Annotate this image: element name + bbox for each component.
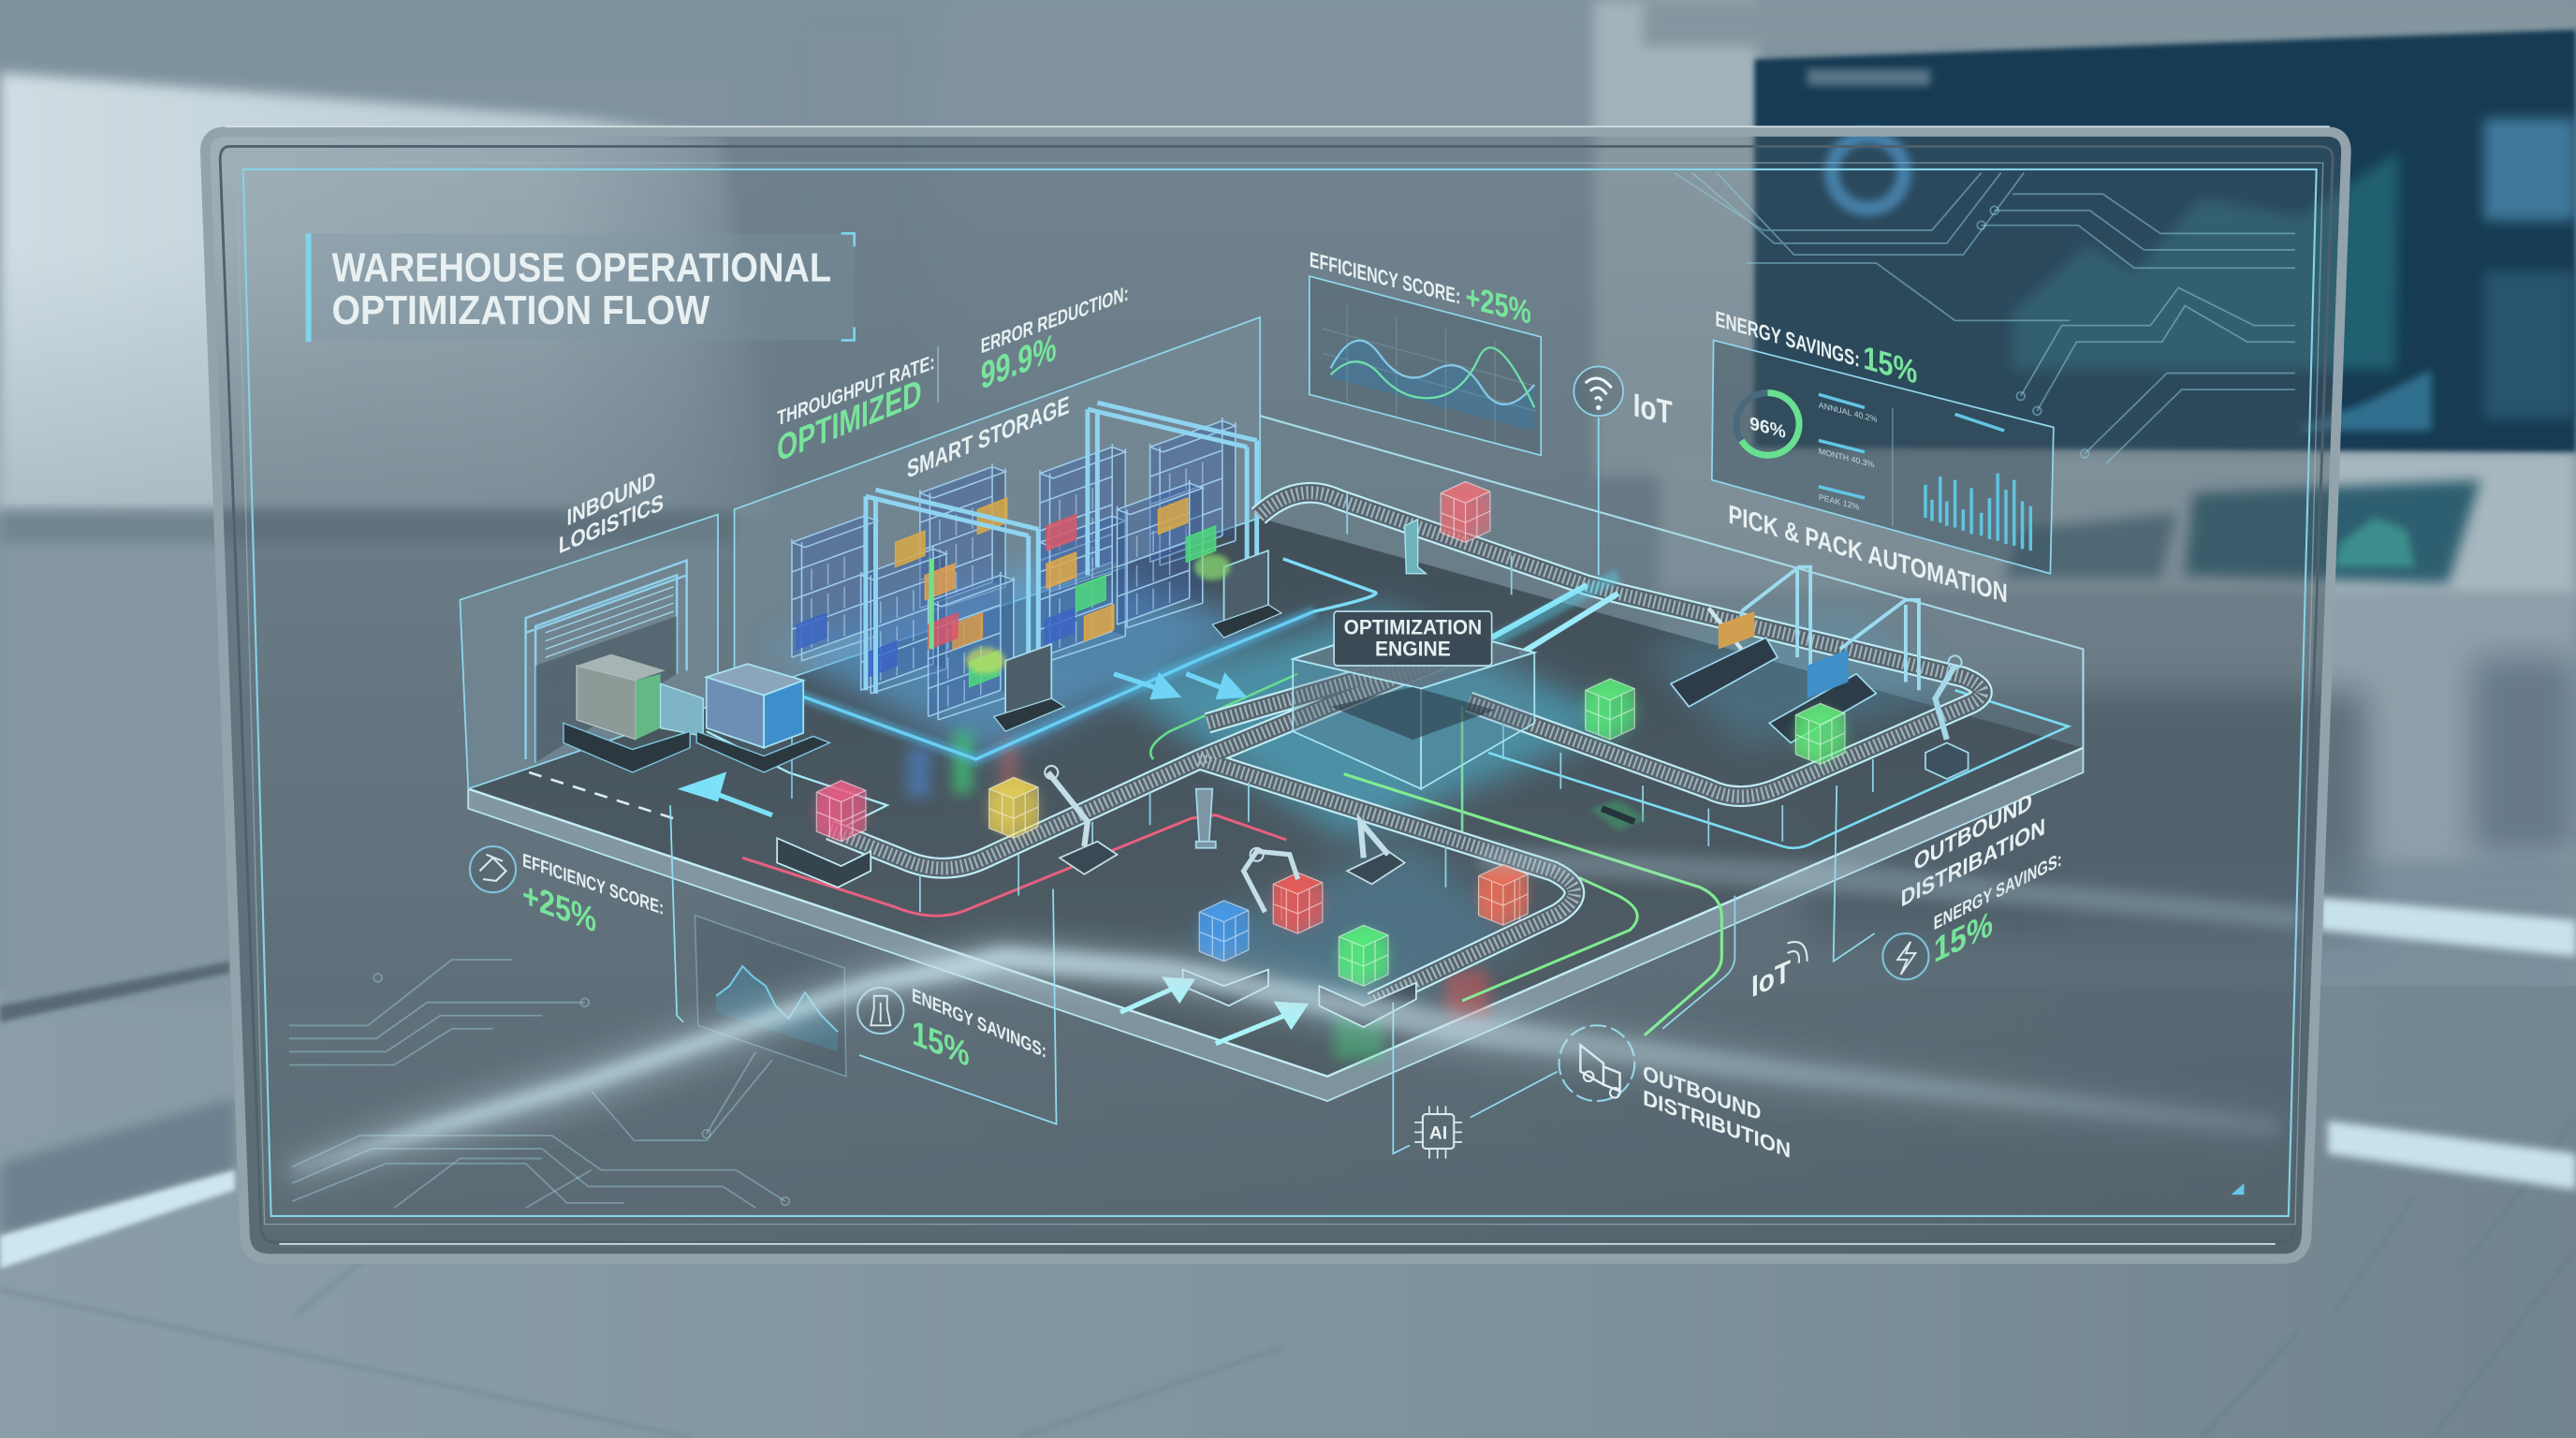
inbound logistics label: LOGISTICS: [559, 490, 664, 559]
robot arm right: [1925, 655, 1969, 779]
IoT badge top: [1573, 367, 1673, 575]
engine label: [1334, 611, 1492, 666]
callout: outbound and energy right: DISTRIBATION: [1901, 813, 2045, 913]
small corner marker: [2231, 1183, 2244, 1195]
inbound trailer: [696, 664, 829, 772]
KPI: error reduction: 99.9%: [981, 325, 1057, 398]
robot arm: lower left: [1045, 766, 1117, 874]
storage robots: [966, 550, 1281, 731]
truck badge: OUTBOUND: [1643, 1061, 1761, 1125]
dashboard: energy savings top: ENERGY SAVINGS:: [1715, 306, 1860, 372]
stored crates: [797, 498, 1216, 687]
pick and pack stations: [1671, 567, 1969, 779]
callout: energy savings lower: ENERGY SAVINGS:: [912, 985, 1046, 1063]
floor glow reflections: [772, 559, 1955, 1027]
chart: lower trend: [695, 916, 846, 1077]
title block: [305, 233, 855, 342]
gantry frames: [866, 403, 1257, 703]
callout: efficiency score lower: +25%: [522, 875, 596, 941]
teal robot post: [1405, 520, 1426, 574]
dashboard: energy savings top: [1712, 306, 2054, 574]
smart storage label: SMART STORAGE: [907, 390, 1070, 484]
KPI: throughput rate: THROUGHPUT RATE:: [777, 349, 935, 431]
background: floor tile lines: [0, 1118, 2576, 1438]
conveyor lower: [829, 649, 1574, 1003]
dashboard: energy savings top: MONTH 40.3%: [1819, 447, 1874, 469]
cubes on conveyors: [816, 481, 1845, 986]
dashed inbound route: [529, 772, 674, 818]
warehouse platform: [460, 317, 2083, 1101]
IoT badge top: IoT: [1633, 387, 1673, 432]
right outline route: [1488, 690, 2069, 848]
conveyor link to engine: [1486, 575, 1618, 654]
inbound truck: [564, 654, 703, 772]
KPI: throughput rate: OPTIMIZED: [777, 371, 922, 470]
dashboard: energy savings top: ANNUAL 40.2%: [1819, 401, 1878, 424]
KPI: error reduction: ERROR REDUCTION:: [981, 281, 1129, 358]
callout: energy savings lower: [857, 889, 1057, 1124]
truck badge: DISTRIBUTION: [1643, 1085, 1791, 1163]
engine label: ENGINE: [1375, 637, 1451, 660]
donut gauge: 96%: [1749, 413, 1786, 443]
inbound logistics dock: [526, 561, 829, 772]
panel inner cyan border: [243, 169, 2317, 1216]
scanner post: [1196, 789, 1216, 848]
KPI: error reduction: [981, 281, 1129, 398]
pink route: [742, 815, 1286, 916]
panel frame: [205, 132, 2346, 1259]
small robot on floor: [1590, 800, 1647, 831]
callout: outbound and energy right: OUTBOUND: [1914, 787, 2032, 876]
conveyor legs: [920, 493, 1873, 920]
engine label: OPTIMIZATION: [1344, 616, 1482, 639]
chart: efficiency score top: EFFICIENCY SCORE:: [1310, 247, 1460, 309]
title block: WAREHOUSE OPERATIONAL: [332, 244, 831, 290]
connector left: [670, 805, 683, 1022]
floor route lines: [529, 559, 2069, 1035]
glass panel: [205, 126, 2346, 1259]
robot arm: centre: [1244, 848, 1298, 912]
donut gauge: [1736, 393, 1799, 455]
title block: OPTIMIZATION FLOW: [332, 287, 710, 333]
pack gantry B: [1769, 600, 1919, 742]
pack gantry A: [1671, 567, 1810, 707]
circuit traces bottom left: [289, 960, 789, 1208]
optimization engine: [1293, 611, 1534, 789]
dashboard bars: [1925, 474, 2030, 550]
green routes: [1344, 774, 1721, 1035]
pick and pack label: PICK & PACK AUTOMATION: [1728, 500, 2008, 609]
callout: outbound and energy right: [1834, 785, 2062, 979]
back walls: [460, 514, 718, 789]
callout: outbound and energy right: 15%: [1934, 904, 1993, 971]
dashboard: energy savings top: PEAK 12%: [1819, 492, 1859, 512]
AGV carts: [777, 838, 1416, 1027]
background: floor light streaks: [2320, 897, 2576, 1190]
chart: efficiency score top: [1310, 247, 1541, 455]
dashboard: energy savings top: 15%: [1863, 339, 1917, 391]
IoT label lower: IoT: [1751, 954, 1791, 1005]
light beam over panel: [279, 846, 2300, 1193]
callout: efficiency score lower: [470, 846, 664, 941]
AI chip icon: [1393, 1003, 1558, 1158]
AI chip icon: AI: [1429, 1123, 1447, 1143]
conveyor network: [829, 492, 1982, 1003]
cube glows: [816, 492, 1845, 981]
robot arm: right centre: [1347, 822, 1405, 884]
flow arrows: [685, 674, 1305, 1044]
platform base slab: [468, 748, 2083, 1101]
callout: outbound and energy right: ENERGY SAVINGS:: [1934, 848, 2062, 934]
IoT label lower: [1751, 942, 1808, 1005]
truck badge: [1559, 1025, 1791, 1163]
robot arms: [1045, 766, 1405, 912]
smart storage racks: [792, 403, 1281, 731]
chart: efficiency score top: +25%: [1466, 278, 1531, 331]
blue storage route: [785, 559, 1376, 759]
background: wall monitor: [1754, 30, 2576, 583]
inbound logistics label: INBOUND: [567, 467, 655, 531]
callout: efficiency score lower: EFFICIENCY SCORE:: [522, 850, 664, 919]
circuit traces top right: [1674, 172, 2295, 463]
conveyor upper: [1258, 492, 1982, 797]
callout: energy savings lower: 15%: [912, 1013, 970, 1075]
